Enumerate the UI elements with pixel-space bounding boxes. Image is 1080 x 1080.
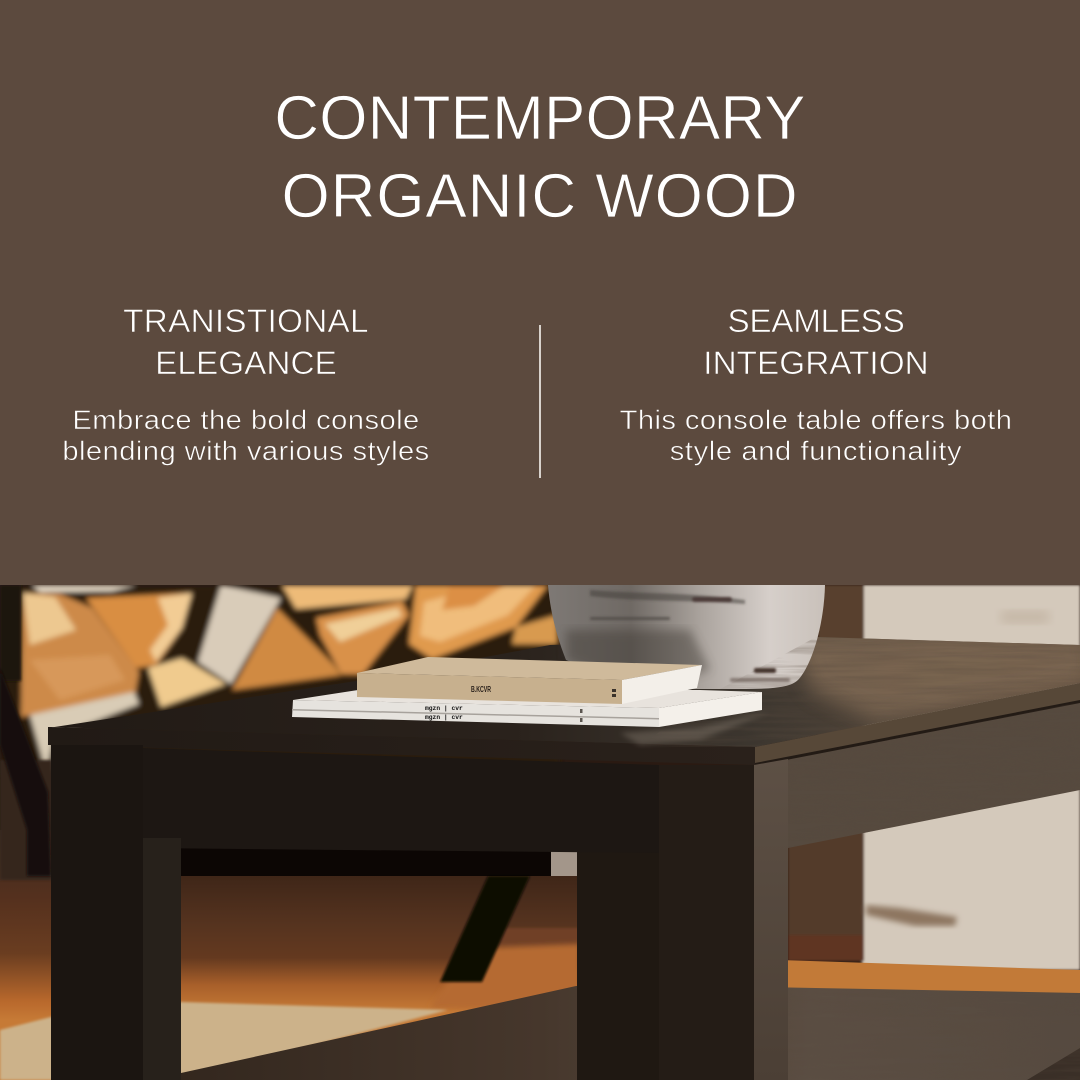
wood grain overlay (688, 640, 1068, 833)
table top front band (48, 727, 755, 765)
left heading: ELEGANCE (155, 345, 337, 381)
left heading: TRANISTIONAL (123, 303, 369, 339)
lower book spine text: mgzn | cvr (425, 705, 463, 712)
left heading (123, 303, 369, 381)
title (274, 84, 806, 231)
vase (548, 585, 825, 689)
chair frame (0, 585, 551, 982)
upper book (357, 657, 702, 704)
left body text (62, 405, 430, 466)
left leg (51, 745, 181, 1080)
rug (0, 1002, 448, 1080)
table top surface (48, 637, 1080, 747)
left body text: Embrace the bold console (72, 405, 420, 435)
right body text (620, 405, 1012, 466)
room background (0, 585, 1080, 1080)
title: CONTEMPORARY (274, 84, 806, 153)
photo: console table in a room (0, 585, 1080, 1080)
table top side band (755, 683, 1080, 763)
title: ORGANIC WOOD (281, 162, 799, 231)
back leg (577, 850, 659, 1080)
tabletop warm sheen (790, 630, 1080, 722)
lower books (292, 690, 762, 727)
vase shadow (566, 630, 710, 689)
lower shelf (181, 985, 1080, 1080)
front apron (143, 748, 659, 853)
chair leg (440, 876, 530, 982)
tabletop book reflection (620, 712, 770, 745)
right heading: INTEGRATION (703, 345, 929, 381)
right body text: This console table offers both (620, 405, 1012, 435)
left column: transitional elegance (62, 303, 430, 466)
vase weathering marks (590, 590, 790, 682)
right leg (659, 759, 788, 1080)
wall and pillar (512, 585, 1080, 970)
right body text: style and functionality (670, 436, 962, 466)
right heading (703, 303, 929, 381)
lower books: mgzn | cvr (425, 714, 463, 721)
left body text: blending with various styles (62, 436, 430, 466)
right heading: SEAMLESS (728, 303, 904, 339)
floor (0, 830, 1080, 1080)
vertical divider (539, 325, 540, 478)
right column: seamless integration (620, 303, 1012, 466)
side apron (755, 696, 1080, 848)
firewood stack (0, 585, 560, 775)
upper book spine text: B.KCVR (471, 685, 491, 694)
